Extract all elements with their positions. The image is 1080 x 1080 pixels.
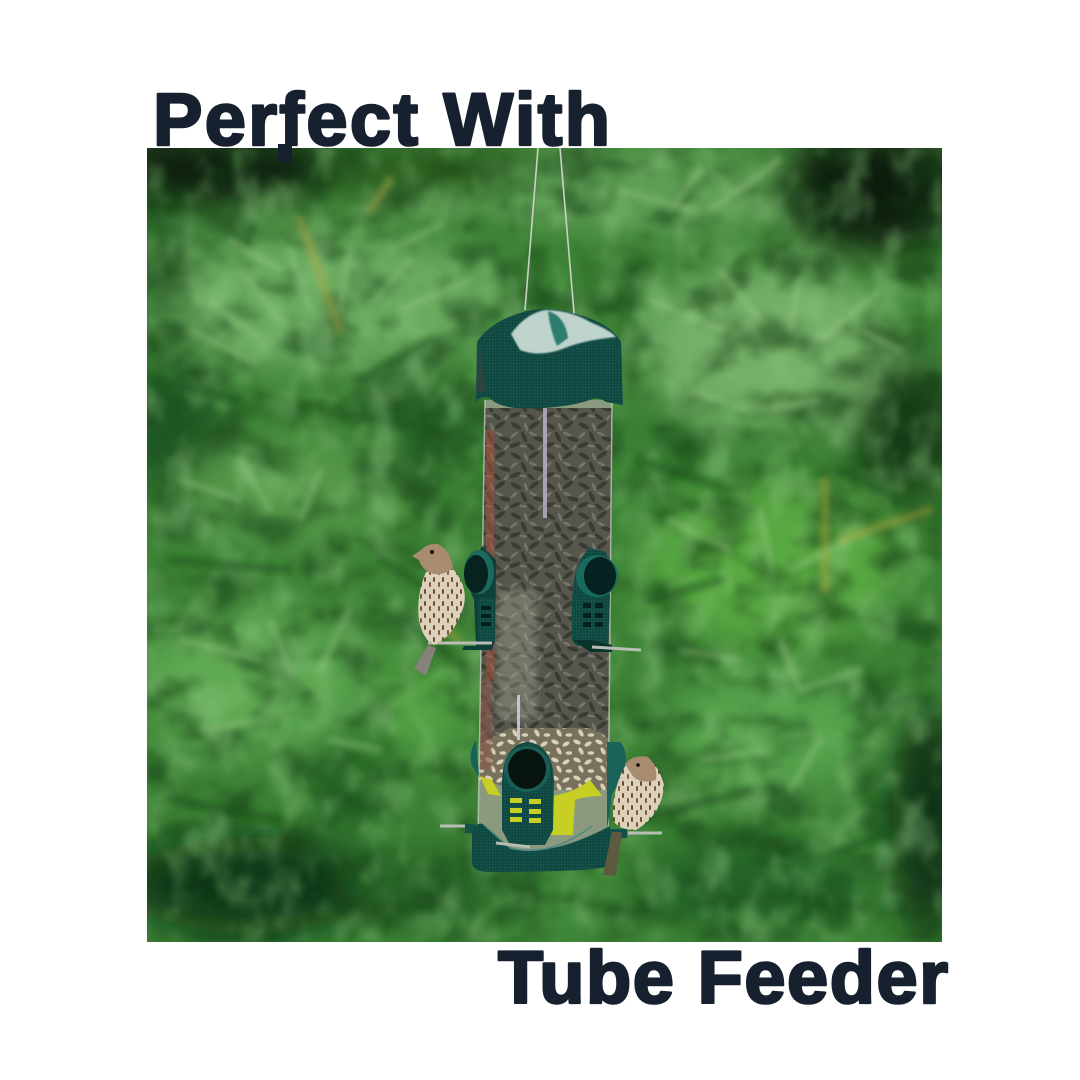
bird: right finch (603, 756, 664, 876)
upper left perch (428, 642, 492, 644)
lower right port side (607, 742, 626, 830)
hanging wire (525, 148, 576, 336)
base tray (472, 824, 610, 872)
upper right perch (592, 647, 641, 650)
foliage mottling: highlights (147, 148, 942, 942)
bird: left finch (412, 544, 465, 676)
green roof cap (476, 309, 623, 408)
title: Tube Feeder: Tube Feeder (498, 936, 948, 1019)
lower perches (440, 826, 662, 847)
tube feeder (428, 148, 662, 872)
yellow seed baffle (480, 776, 602, 835)
upper left feeding port (462, 546, 496, 650)
foliage mottling: shadows (147, 148, 942, 942)
lower front feeding port (502, 742, 554, 845)
photo: blurred pine foliage background (147, 148, 942, 942)
lower left port side (471, 740, 479, 776)
upper right feeding port (572, 548, 618, 652)
title: Perfect With: Perfect With (153, 78, 610, 161)
clear seed tube (478, 400, 613, 856)
